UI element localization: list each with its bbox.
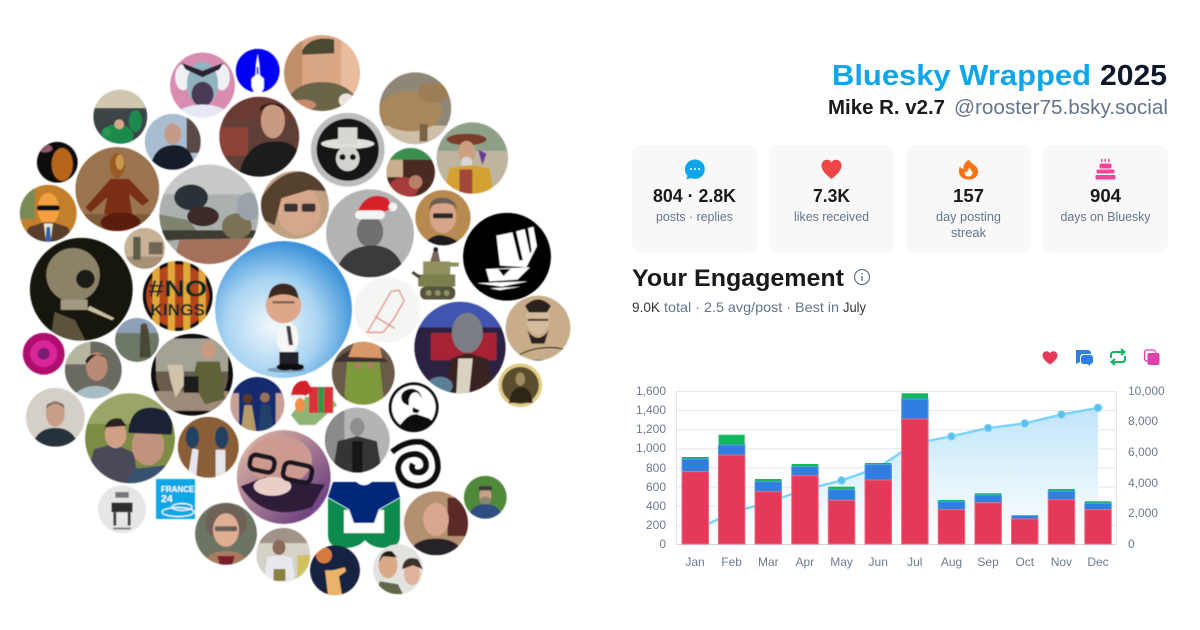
title: 2025 [1100, 60, 1167, 92]
avatar: couple selfie [373, 544, 423, 594]
avatar: woman with curly hair [195, 503, 257, 565]
avatar: white uniforms crowd [256, 528, 310, 582]
month labels: Apr [796, 555, 814, 569]
engagement summary: 9.0K [632, 299, 661, 315]
month labels: Oct [1015, 555, 1035, 569]
avatar: muppet eagle [169, 52, 236, 118]
panel: days stat [1043, 145, 1168, 253]
avatar: soldier and donkey [124, 228, 165, 269]
chart legend icons [1042, 349, 1160, 366]
avatar: man in dark coat [145, 114, 201, 170]
avatar: soldier with cap [284, 35, 360, 111]
bars: February [718, 435, 745, 544]
avatar: france 24 logo: 24 [161, 493, 173, 505]
avatar: man with mountains [115, 318, 159, 362]
avatar: soldier with llama, black ring [151, 334, 233, 416]
month labels: Jul [907, 555, 922, 569]
bars: August [938, 500, 965, 544]
left axis labels: 600 [646, 480, 666, 494]
value: 904 [1090, 185, 1122, 206]
avatar: woman with glasses [261, 171, 329, 239]
left axis labels: 1,200 [636, 422, 666, 436]
avatar: red hair [37, 142, 78, 183]
avatar: magenta dahlia [23, 333, 65, 375]
avatar: no kings: #NO [148, 276, 207, 302]
icon: flame [959, 160, 978, 180]
icon: info [854, 270, 870, 284]
profile name and handle [828, 97, 1168, 119]
month labels: Nov [1051, 555, 1072, 569]
avatar: skull with cigarette [30, 238, 133, 341]
month labels: Jan [685, 555, 705, 569]
month labels: Aug [941, 555, 962, 569]
avatar: copper superhero [75, 147, 159, 233]
avatar: hand and ring [310, 545, 360, 595]
cumulative line [695, 408, 1098, 530]
title: Bluesky Wrapped [832, 60, 1091, 92]
avatar: man at bookshelf [219, 97, 299, 177]
avatar: france 24 logo: FRANCE [161, 485, 195, 494]
left axis labels: 800 [646, 461, 666, 475]
label: likes received [794, 210, 869, 224]
bars: March [755, 479, 782, 544]
avatar: cowboy costume [437, 122, 508, 194]
right axis labels: 6,000 [1128, 445, 1158, 459]
avatar: green crowd [93, 90, 147, 148]
avatar: blue logo [236, 49, 280, 93]
profile name and handle: Mike R. v2.7 [828, 97, 945, 119]
avatar: old portrait [498, 363, 542, 407]
avatar: selfie with two men [85, 393, 175, 483]
label: posts · replies [656, 210, 733, 224]
bars: January [682, 457, 708, 544]
bars: September [975, 493, 1001, 544]
icon: heart [822, 160, 842, 179]
right axis labels: 10,000 [1128, 384, 1165, 398]
avatar: capybara [379, 72, 451, 144]
heading: your engagement: Your Engagement [632, 265, 844, 292]
icon: birthday cake [1096, 159, 1116, 180]
grid lines [676, 391, 1116, 544]
bars: April [792, 464, 818, 544]
left axis labels: 200 [646, 518, 666, 532]
bars: November [1048, 489, 1075, 544]
panel: streak stat [906, 145, 1031, 253]
bars: July [902, 393, 928, 544]
right axis labels [1128, 384, 1165, 551]
engagement summary: July [843, 299, 866, 315]
right axis labels: 0 [1128, 537, 1135, 551]
icon: reposts [1111, 349, 1125, 365]
cumulative area [695, 408, 1098, 544]
avatar: lincoln logo [389, 382, 439, 432]
label: day posting [936, 210, 1001, 224]
avatar: bald man [404, 491, 468, 555]
left axis labels: 1,000 [636, 441, 666, 455]
right axis labels: 8,000 [1128, 414, 1158, 428]
icon: likes [1042, 351, 1058, 364]
avatar: bearded sketch [506, 296, 570, 360]
label: days on Bluesky [1060, 210, 1151, 224]
avatar: spiral logo [392, 442, 438, 486]
month labels: Feb [721, 555, 742, 569]
bars: May [828, 487, 855, 544]
profile name and handle: @rooster75.bsky.social [954, 97, 1168, 119]
avatar: pirate ship [463, 213, 551, 301]
panel: likes stat [769, 145, 894, 253]
bars: December [1085, 501, 1111, 544]
avatar: grill logo [98, 485, 146, 533]
icon: replies [1076, 350, 1093, 366]
avatar: bald man in polo [26, 388, 85, 447]
value: 157 [953, 185, 984, 206]
avatar: whalers logo [328, 482, 400, 548]
avatar: man with glasses [415, 190, 471, 245]
bars: October [1012, 515, 1038, 544]
right axis labels: 4,000 [1128, 476, 1158, 490]
avatar: no kings [143, 261, 213, 331]
avatar: skull patch [311, 113, 385, 187]
left axis labels: 400 [646, 499, 666, 513]
avatar: no kings: KINGS [150, 301, 205, 320]
avatar: speaker in black and white [325, 408, 390, 472]
cumulative points [838, 404, 1102, 484]
avatar: smiling bearded man in purple [237, 430, 331, 524]
avatar: general with santa hat [326, 189, 414, 277]
value: 7.3K [813, 185, 851, 206]
avatar: france 24 logo [156, 479, 195, 519]
panel: posts stat [632, 145, 757, 253]
avatar: gift with santa hat [291, 381, 337, 425]
left axis labels [636, 384, 666, 551]
avatar: cartoon tank [412, 247, 459, 300]
icon: chat bubble [685, 159, 705, 179]
month labels: Dec [1087, 555, 1109, 569]
avatar: muppet soldier painting [159, 165, 261, 264]
avatar cloud [20, 35, 571, 595]
stacked bars [682, 393, 1111, 544]
chart: monthly engagement stacked bars with cumulative line [636, 384, 1165, 569]
avatar: cartoon with sunglasses [20, 185, 77, 242]
avatar: grey muppet in suit [414, 302, 506, 395]
month labels: Mar [758, 555, 779, 569]
avatar: peanuts character, largest bubble [215, 241, 352, 378]
label: streak [951, 226, 987, 240]
icon: quotes [1144, 350, 1160, 365]
left axis labels: 0 [659, 537, 666, 551]
avatar: red line sketch [354, 277, 420, 343]
month labels: Jun [869, 555, 888, 569]
avatar: bearded man outdoors [464, 476, 507, 519]
right axis labels: 2,000 [1128, 506, 1158, 520]
avatar: two figures before flags [230, 377, 284, 431]
engagement summary: total · 2.5 avg/post · Best in [664, 299, 839, 315]
bars: June [865, 463, 892, 544]
left axis labels: 1,400 [636, 403, 666, 417]
avatar: man driving [65, 342, 122, 398]
label [936, 210, 1001, 240]
avatar: sandals on wood floor [178, 417, 239, 478]
month labels: May [830, 555, 853, 569]
left axis labels: 1,600 [636, 384, 666, 398]
avatar: cthulhu knit mask [332, 340, 395, 405]
avatar: woman in green visor [386, 148, 435, 199]
value: 804 · 2.8K [653, 185, 737, 206]
month labels: Sep [977, 555, 999, 569]
month labels [685, 555, 1109, 569]
